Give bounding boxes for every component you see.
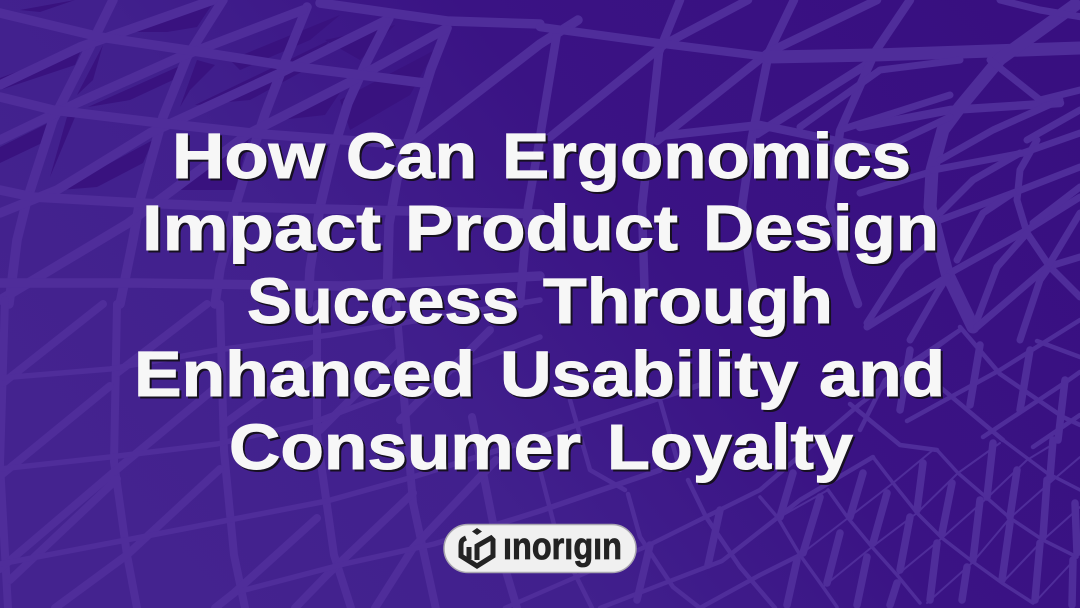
lower-centre beams	[505, 320, 1080, 608]
title: Consumer	[229, 411, 581, 483]
upper-left beams	[0, 0, 578, 304]
lower-left beams	[0, 300, 517, 608]
logo wordmark: inorigin	[503, 526, 622, 568]
title: Design	[703, 192, 939, 264]
title: Usability	[500, 338, 798, 410]
title: Success	[247, 265, 519, 337]
title: and	[819, 338, 945, 410]
title: Loyalty	[607, 411, 853, 483]
title: Impact	[142, 192, 381, 264]
right fan beams	[800, 0, 1080, 340]
title: Product	[405, 192, 678, 264]
title: How	[172, 120, 325, 192]
title: Ergonomics	[502, 120, 911, 192]
logo badge	[444, 524, 636, 572]
title	[134, 120, 945, 483]
title: Can	[346, 120, 477, 192]
title: Through	[543, 265, 833, 337]
icon: inorigin hexagon mark	[461, 528, 493, 566]
lower-right diamond grid	[760, 440, 1080, 607]
title: Enhanced	[134, 338, 475, 410]
upper-right beams	[520, 0, 1060, 304]
